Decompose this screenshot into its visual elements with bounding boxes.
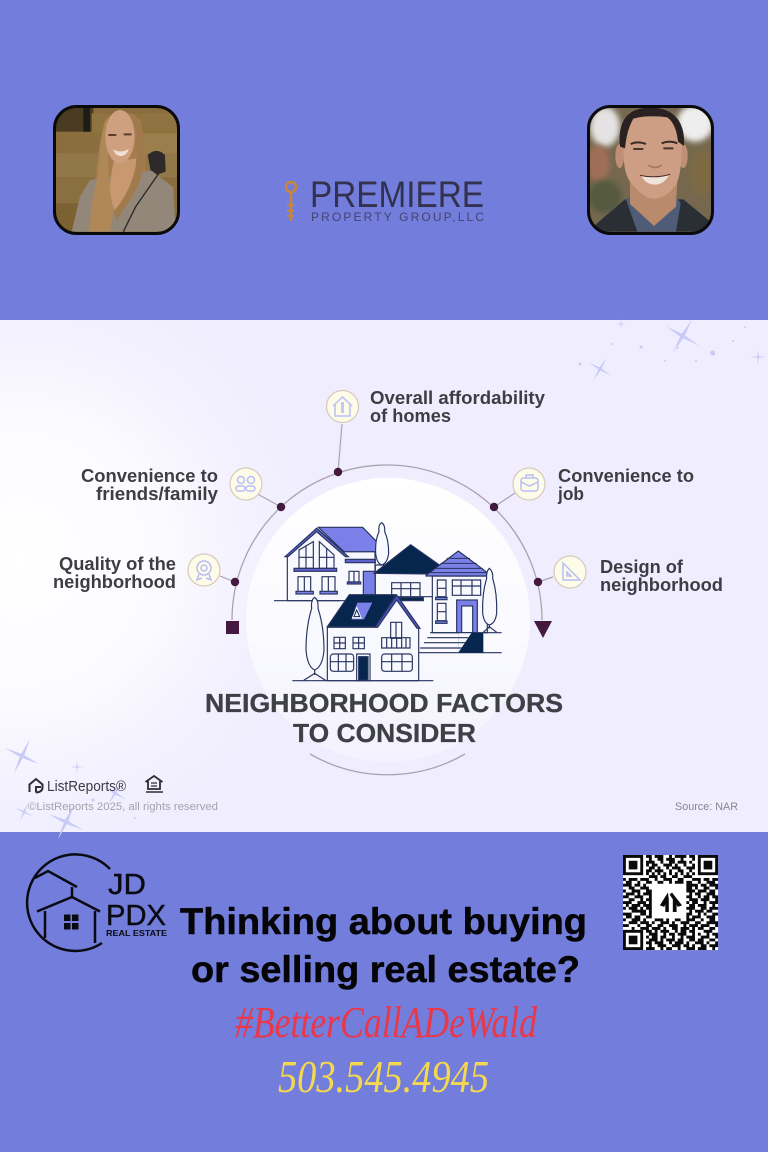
label: friends and family: friends/family xyxy=(96,484,218,504)
label: affordability xyxy=(370,388,545,426)
icon: design xyxy=(554,556,586,588)
QR finder patterns xyxy=(624,856,717,949)
lower arc xyxy=(310,754,465,775)
title: TO CONSIDER xyxy=(293,718,476,748)
hashtag: #BetterCallADeWald xyxy=(235,998,538,1047)
QR code xyxy=(623,855,718,950)
logo: ListReports: ListReports® xyxy=(47,778,126,795)
front tree xyxy=(303,597,326,681)
label: job xyxy=(557,466,694,504)
front house xyxy=(327,595,420,681)
logo text: JD xyxy=(108,869,146,901)
source: Source: NAR xyxy=(675,801,738,813)
label: design xyxy=(600,557,723,595)
label: design: neighborhood xyxy=(600,575,723,595)
label: job: job xyxy=(557,484,584,504)
QR modules xyxy=(623,856,718,949)
label: friends and family xyxy=(81,466,218,504)
semicircle arc xyxy=(232,465,542,620)
photo: man agent xyxy=(587,105,717,235)
logo text: REAL ESTATE xyxy=(106,928,167,938)
title xyxy=(205,688,563,748)
label: design: Design of xyxy=(600,557,684,577)
label: quality: neighborhood xyxy=(53,572,176,592)
arc dots xyxy=(231,468,542,586)
sparkles: top right xyxy=(578,310,766,387)
label: affordability: Overall affordability xyxy=(370,388,545,408)
back ground line xyxy=(274,599,340,602)
ground line xyxy=(292,679,433,682)
phone number: 503.545.4945 xyxy=(278,1051,489,1102)
icon: key xyxy=(286,182,296,221)
headline: Thinking about buying xyxy=(180,901,587,942)
logo house xyxy=(35,871,100,943)
panel: neighborhood factors xyxy=(0,310,768,847)
connectors xyxy=(220,424,553,582)
label: friends and family: Convenience to xyxy=(81,466,218,486)
center white circle xyxy=(246,478,530,762)
right house xyxy=(426,551,487,633)
icon: job xyxy=(513,468,545,500)
arc start square xyxy=(226,621,239,634)
QR finder centers xyxy=(629,861,712,944)
copyright: ©ListReports 2025, all rights reserved xyxy=(28,801,218,813)
icon: quality xyxy=(188,554,220,586)
logo circle xyxy=(27,854,110,951)
right tree xyxy=(483,568,497,632)
illustration: houses xyxy=(274,523,502,681)
stairs xyxy=(418,633,502,653)
headline: or selling real estate? xyxy=(191,949,580,990)
icon: friends and family xyxy=(230,468,262,500)
logo: Premiere Property Group xyxy=(286,174,484,224)
title: NEIGHBORHOOD FACTORS xyxy=(205,688,563,718)
headline xyxy=(180,901,587,990)
photo: woman agent xyxy=(52,105,182,235)
logo text xyxy=(106,869,167,938)
logo wordmark: PREMIERE xyxy=(310,174,484,215)
logo: JD PDX Real Estate xyxy=(27,854,167,951)
logo text: PDX xyxy=(106,900,166,932)
icon: affordability xyxy=(326,390,358,422)
logo subtitle: PROPERTY GROUP,LLC xyxy=(311,210,484,224)
logo window xyxy=(64,914,78,930)
back tree xyxy=(376,523,389,565)
arc end triangle xyxy=(534,621,552,638)
label: job: Convenience to xyxy=(558,466,694,486)
label: affordability: of homes xyxy=(370,406,451,426)
label: quality xyxy=(53,554,176,592)
QR center logo xyxy=(653,885,684,918)
label: quality: Quality of the xyxy=(59,554,176,574)
middle house xyxy=(374,545,439,601)
sparkles: bottom left xyxy=(0,731,136,847)
icon: equal housing xyxy=(146,776,163,792)
back left house xyxy=(285,527,377,601)
